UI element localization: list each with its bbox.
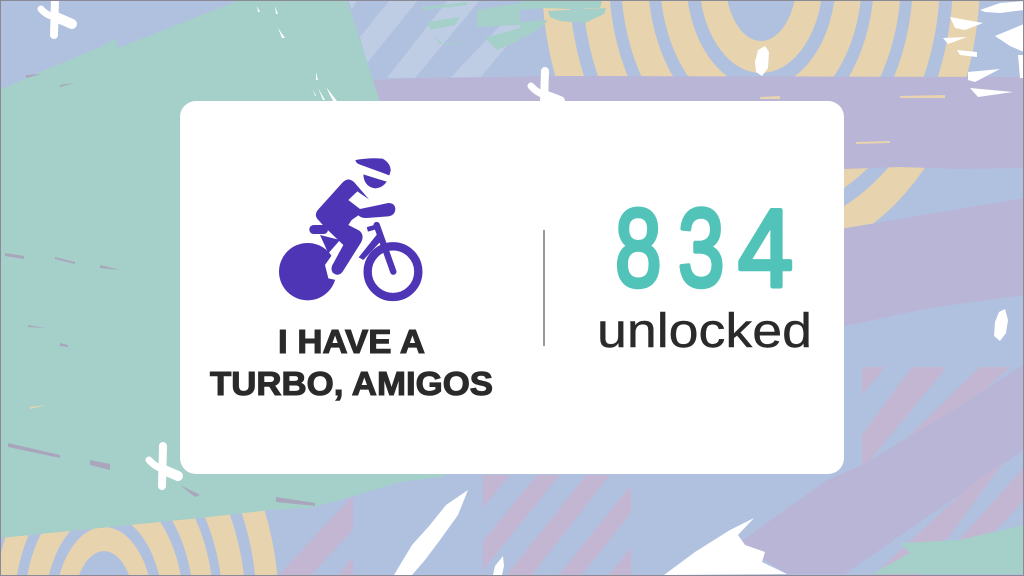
stripes below lower right purple [872,463,1024,576]
purple brush band: right [840,198,1024,327]
concentric rings: top right [543,1,980,228]
number: 834: 8 [615,187,662,310]
background stripes: top [348,0,520,78]
teal brush: main [0,0,445,538]
white flecks on teal [257,6,337,101]
helmet [356,158,391,175]
teal brush: top specks [422,1,606,50]
number: 834 [615,187,793,310]
grey speckle marks [5,74,315,506]
rear wheel [279,243,336,300]
background stripes: right [862,367,1010,470]
number: 834: 3 [678,187,725,310]
fork [377,225,393,272]
white cross: top centre [531,71,560,103]
background stripes: bottom [278,475,631,576]
face [363,174,387,188]
leg outline [325,237,367,282]
white card [180,101,844,474]
white blob: bottom [493,556,504,575]
white brush: bottom centre [394,490,468,575]
white cross: bottom left [149,446,178,486]
tan speckle marks [30,95,945,409]
white splatter: top right [943,1,1024,97]
concentric rings: bottom left [1,510,278,575]
rider body and leg [316,179,395,275]
saddle [309,225,328,234]
heading: I have a turbo, amigos: I HAVE A [278,323,425,360]
bike frame [320,234,382,260]
front wheel [368,246,418,297]
white blob: right [994,309,1008,341]
handlebar [367,226,379,229]
teal brush: lower right corner [872,525,1024,574]
purple brush band: top [372,76,1024,170]
divider [543,230,545,346]
icon: cyclist [279,158,418,300]
purple brush band: lower right [740,364,1024,574]
white cross: top left [41,0,72,35]
white brush: bottom right [664,518,787,575]
white blob: top [755,46,769,76]
heading: I have a turbo, amigos: TURBO, AMIGOS [210,365,493,402]
label: unlocked: unlocked [597,305,812,358]
number: 834: 4 [738,187,793,310]
heading: I have a turbo, amigos [210,323,493,402]
